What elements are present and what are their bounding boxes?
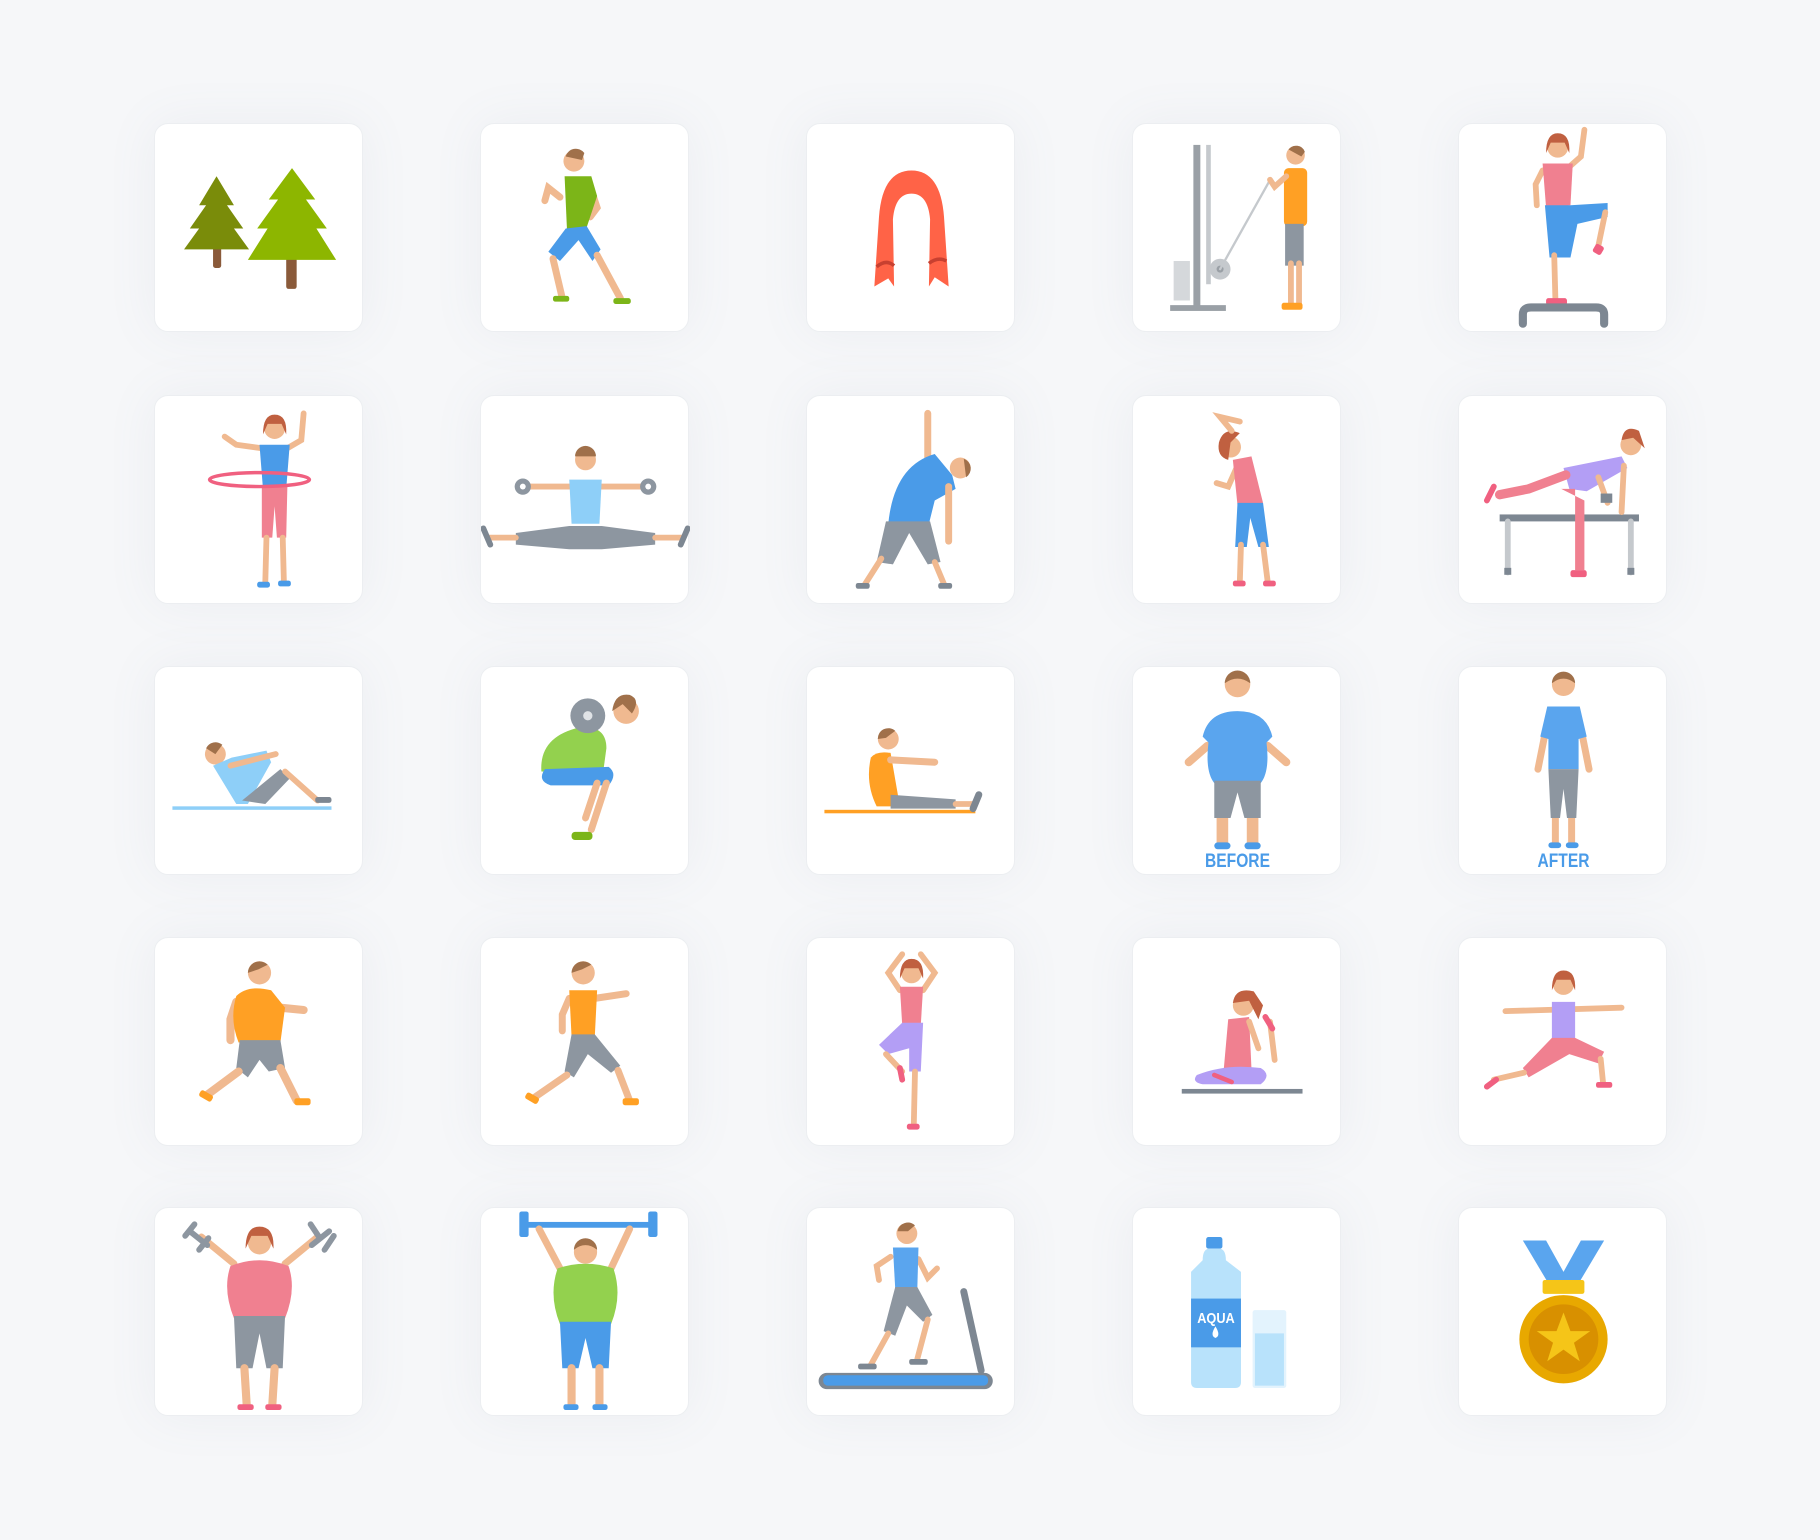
icon: overhead barbell [519, 1211, 657, 1410]
icon: gold medal [1519, 1241, 1608, 1383]
icon: after slim man [1538, 672, 1589, 848]
card: step up [1458, 123, 1667, 332]
card: trees [154, 123, 363, 332]
icon: split with dumbbells [483, 446, 688, 549]
card: cable machine [1132, 123, 1341, 332]
card: split [480, 395, 689, 604]
card: lunge slim [480, 937, 689, 1146]
icon: cable machine [1170, 145, 1307, 311]
card: medal [1458, 1207, 1667, 1416]
card: water [1132, 1207, 1341, 1416]
icon: runner [545, 149, 631, 304]
icon: lunge man [524, 961, 639, 1105]
icon: crunch [172, 742, 331, 810]
card: barbell [480, 1207, 689, 1416]
icon: water bottle and glass [1191, 1237, 1286, 1388]
label: AFTER: AFTER [1538, 851, 1589, 872]
icon: hula hoop woman [210, 413, 309, 588]
card: treadmill [806, 1207, 1015, 1416]
card: tree pose [806, 937, 1015, 1146]
card: hula hoop [154, 395, 363, 604]
card: towel [806, 123, 1015, 332]
card: bench woman [1458, 395, 1667, 604]
card: seated [806, 666, 1015, 875]
icon: step woman [1523, 130, 1608, 324]
icon: treadmill runner [819, 1223, 993, 1389]
icon: before overweight man [1189, 670, 1286, 849]
card: lunge fat [154, 937, 363, 1146]
icon: squat with plate [541, 695, 639, 840]
card: dumbbell woman [154, 1207, 363, 1416]
label: BEFORE: BEFORE [1205, 851, 1270, 872]
icon: lunge overweight man [198, 961, 311, 1105]
label: AQUA: AQUA [1197, 1310, 1235, 1327]
icon: stretching woman [1217, 417, 1276, 586]
icon: warrior pose woman [1487, 971, 1622, 1088]
card: after [1458, 666, 1667, 875]
icon: seated yoga woman [1182, 990, 1303, 1094]
card: crunch [154, 666, 363, 875]
icon: tree pose woman [879, 954, 935, 1130]
card: seated yoga [1132, 937, 1341, 1146]
card: before [1132, 666, 1341, 875]
icon: bench row woman [1487, 429, 1645, 577]
icon: trees [184, 168, 336, 289]
icon: side bend man [856, 413, 971, 589]
card: runner [480, 123, 689, 332]
icon: seated stretch [824, 728, 979, 813]
card: side bend [806, 395, 1015, 604]
icon: overweight woman with dumbbells [185, 1224, 334, 1410]
icon: towel [874, 170, 949, 287]
card: squat [480, 666, 689, 875]
card: warrior [1458, 937, 1667, 1146]
card: stretch woman [1132, 395, 1341, 604]
